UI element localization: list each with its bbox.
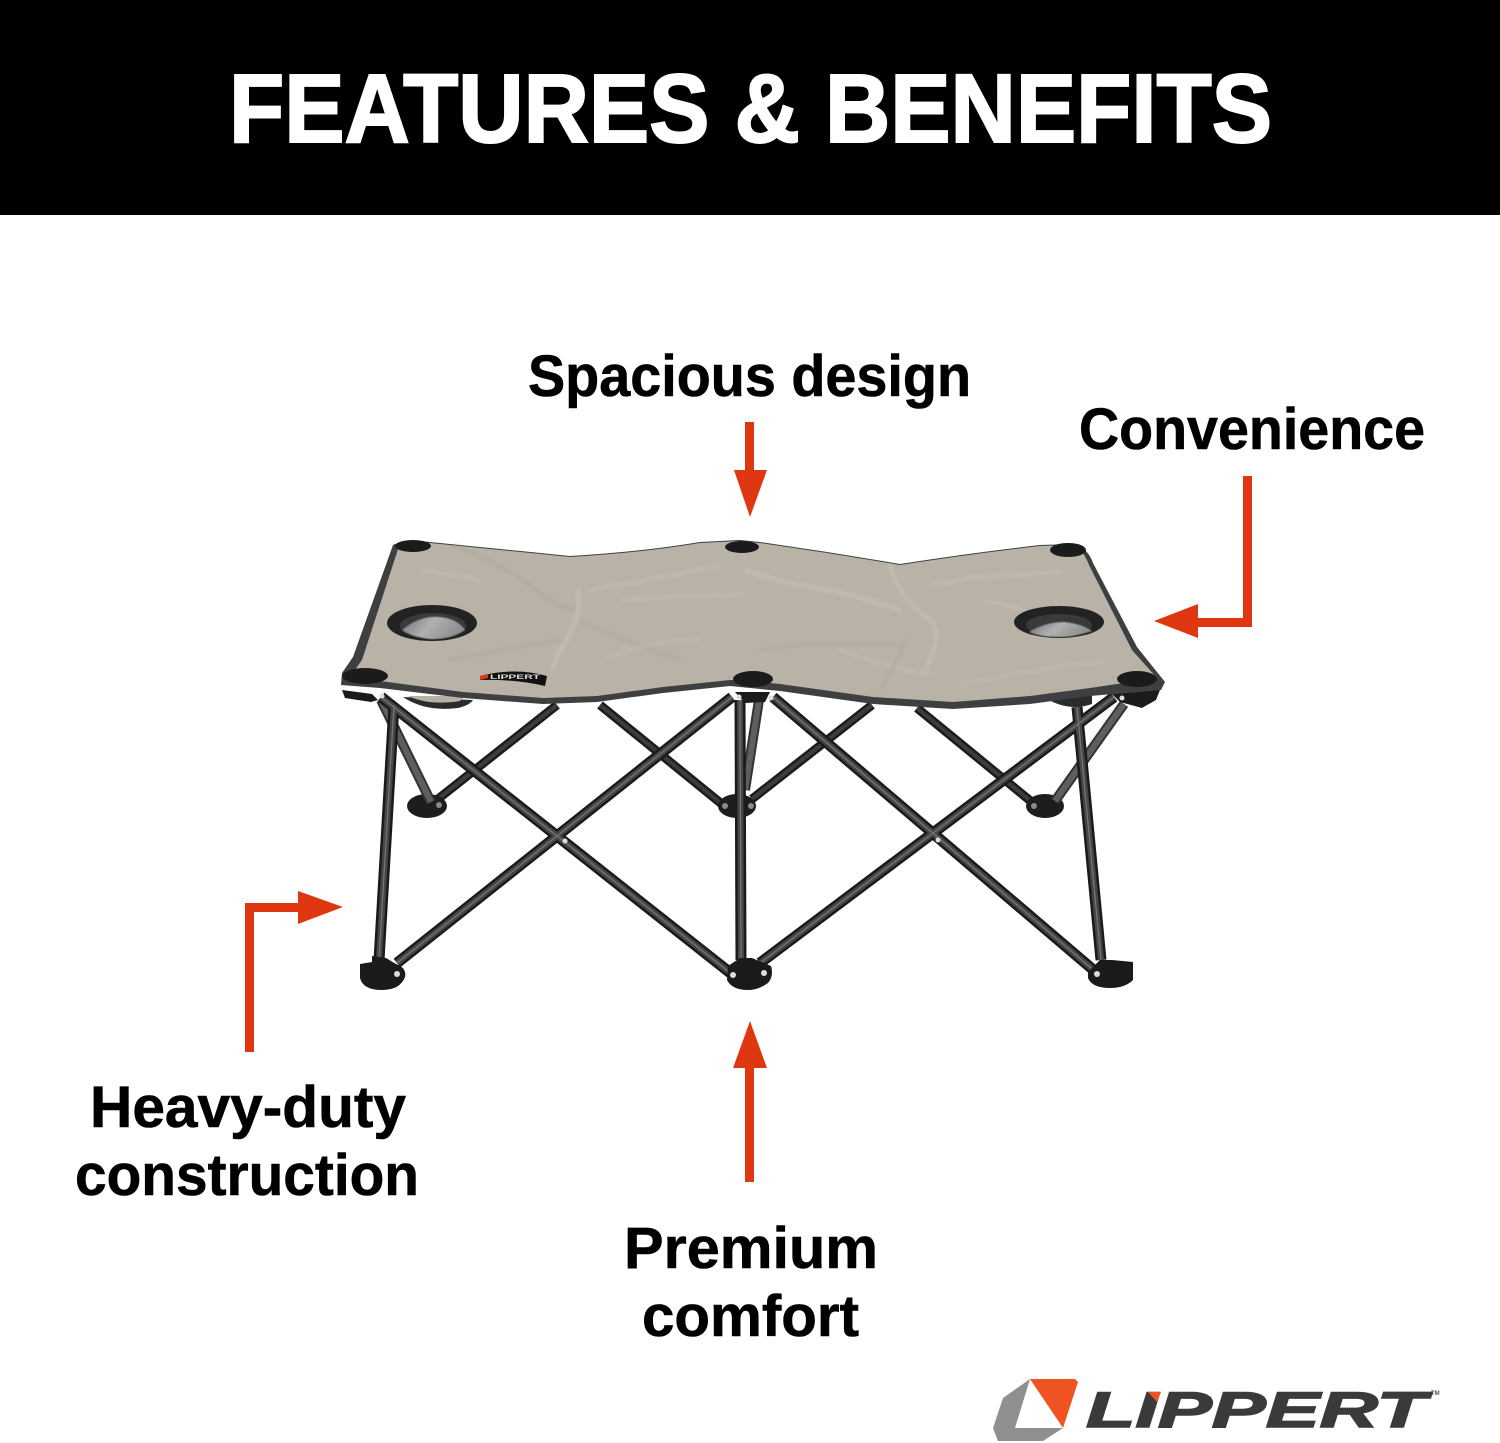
front feet <box>360 956 1133 990</box>
logo mark <box>993 1379 1078 1441</box>
label: premium comfort <box>624 1216 878 1349</box>
label: heavy-duty construction: Heavy-duty <box>90 1075 406 1140</box>
trademark: TM <box>1431 1391 1440 1397</box>
logo accent <box>1148 1392 1161 1402</box>
arrow: premium comfort <box>733 1021 767 1182</box>
fabric brand tag: LIPPERT <box>490 675 541 681</box>
rear frame tubes and feet <box>381 700 1124 818</box>
arrow: heavy-duty construction <box>245 891 343 1052</box>
underside cup pockets <box>403 695 1092 709</box>
header banner <box>0 0 1500 215</box>
fabric wrinkles <box>420 545 1110 690</box>
label: premium comfort: comfort <box>642 1284 859 1349</box>
folding table product <box>341 540 1165 990</box>
logo wordmark: LIPPERT <box>1086 1382 1433 1438</box>
front frame tubes <box>379 697 1114 975</box>
title: FEATURES & BENEFITS <box>229 54 1272 163</box>
cup holder left <box>387 605 477 641</box>
label: heavy-duty construction: construction <box>75 1143 419 1208</box>
cup holder right <box>1014 606 1104 638</box>
Lippert logo <box>993 1379 1440 1441</box>
table top fabric <box>341 540 1165 709</box>
label: convenience: Convenience <box>1079 397 1425 462</box>
label: heavy-duty construction <box>75 1075 419 1208</box>
corner caps <box>342 540 1160 708</box>
arrow: spacious design <box>734 422 767 517</box>
label: premium comfort: Premium <box>624 1216 878 1281</box>
arrow: convenience <box>1154 476 1252 638</box>
fabric brand tag <box>480 672 547 686</box>
label: spacious design: Spacious design <box>528 344 971 409</box>
